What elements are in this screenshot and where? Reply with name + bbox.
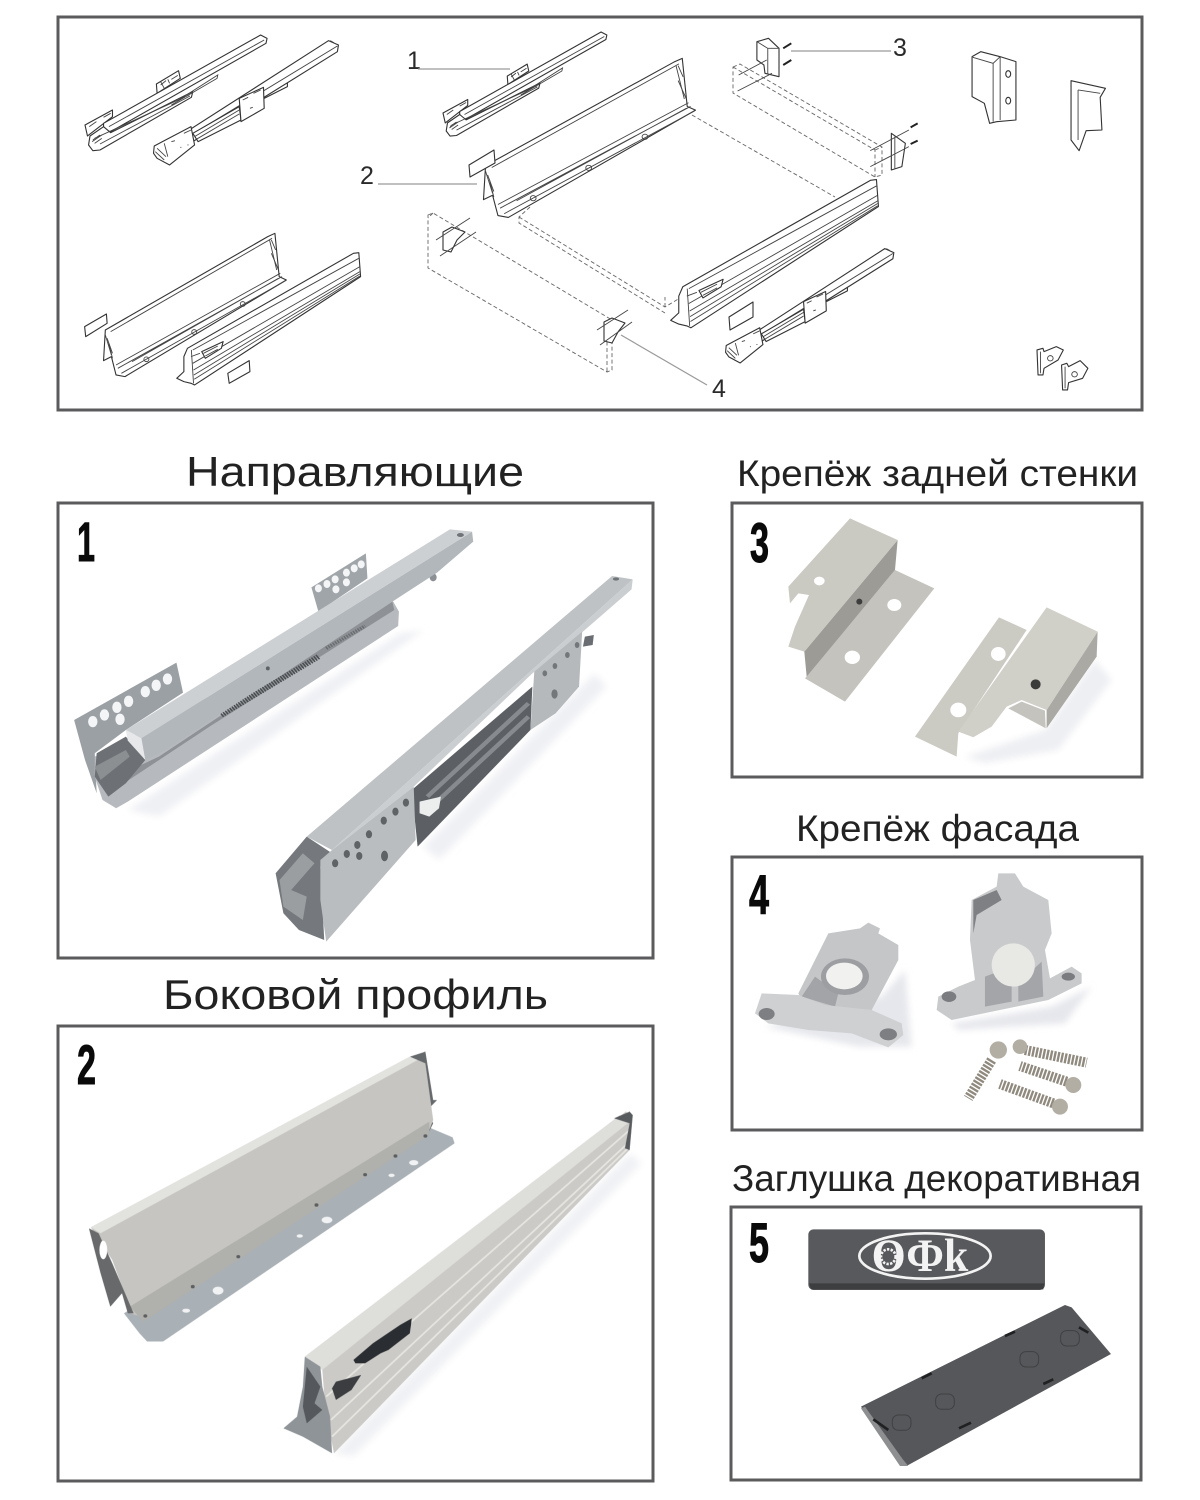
cap back clips bbox=[873, 1327, 1088, 1430]
left fastener: body bbox=[798, 923, 898, 1010]
right fastener: side slot bbox=[973, 890, 1002, 933]
left fastener: white disc bbox=[826, 963, 863, 989]
callout 2 leader bbox=[378, 183, 477, 185]
logo oval bbox=[859, 1233, 991, 1279]
upper rail, right view bbox=[154, 41, 338, 165]
front fastener 2 bbox=[1062, 361, 1088, 390]
profile A: rear edge bbox=[410, 1052, 437, 1135]
profile photos bbox=[89, 1052, 641, 1457]
left parts column bbox=[85, 35, 361, 385]
callout 3 number: 3 bbox=[893, 34, 907, 62]
callout 4 bbox=[621, 335, 726, 403]
cap back edge bbox=[861, 1407, 908, 1466]
panel: exploded assembly diagram bbox=[58, 17, 1142, 410]
right fastener: lower recess bbox=[985, 962, 1043, 1007]
plate outline, centre right bbox=[729, 302, 753, 330]
dashed tray base bbox=[519, 115, 835, 313]
left fastener: disc bbox=[821, 958, 869, 995]
rail B: nose light bbox=[280, 853, 315, 920]
callout 4 leader bbox=[621, 335, 707, 385]
rail B: front plate holes bbox=[332, 799, 409, 867]
rail A: rear plate bbox=[311, 553, 367, 612]
rail A: rear plate holes bbox=[315, 560, 365, 593]
panel 1: rails bbox=[58, 503, 653, 958]
profile B: cut-out upper bbox=[353, 1318, 412, 1363]
number 2: 2 bbox=[77, 1033, 96, 1096]
back bracket with screws, top bbox=[757, 38, 779, 77]
fastener photos bbox=[755, 873, 1092, 1115]
rail A: front plate holes bbox=[88, 673, 172, 727]
dashed front panel bbox=[428, 213, 612, 372]
front fastener screws right bbox=[597, 310, 632, 345]
rail B: mechanism bbox=[412, 687, 532, 847]
right parts group bbox=[738, 38, 1105, 390]
side profile, right view bbox=[177, 253, 361, 385]
rail A: nose light strip bbox=[95, 750, 130, 780]
rail A: spring bbox=[221, 657, 318, 715]
front fasteners bbox=[1037, 347, 1063, 375]
left fastener: base bbox=[755, 993, 903, 1047]
rail B: rear tab bbox=[583, 635, 594, 647]
profile B: rear dark bbox=[614, 1112, 633, 1150]
heading: side profile: Боковой профиль bbox=[163, 971, 548, 1018]
cap back dimples bbox=[892, 1331, 1079, 1430]
heading: decorative cap: Заглушка декоративная bbox=[732, 1158, 1141, 1199]
bracket B: under bbox=[1008, 702, 1046, 728]
rail B: front plate bbox=[320, 787, 416, 942]
right bracket screw tips bbox=[911, 123, 918, 144]
right fastener: body bbox=[937, 873, 1082, 1020]
cap back bbox=[861, 1305, 1111, 1465]
rail A: tube hole bbox=[457, 533, 464, 537]
right fastener: disc bbox=[992, 943, 1035, 987]
cap top bbox=[808, 1229, 1045, 1290]
fastener screw hole 2 bbox=[1072, 372, 1077, 377]
profile B: top band bbox=[305, 1115, 630, 1370]
bracket B: flange bbox=[915, 617, 1027, 757]
frame 1 bbox=[58, 503, 653, 958]
profile B: front end bbox=[283, 1357, 332, 1453]
rail A: tube end bbox=[126, 730, 145, 760]
profile A: main panel bbox=[91, 1057, 433, 1317]
centre rail 1 bbox=[443, 32, 607, 136]
diagram frame bbox=[58, 17, 1142, 410]
rail B: tube hole bbox=[613, 577, 619, 581]
right fastener: holes bbox=[942, 973, 1075, 1002]
profile B: ribs bbox=[326, 1130, 630, 1437]
shadows bbox=[765, 970, 1092, 1047]
frame 2 bbox=[58, 1026, 653, 1481]
bracket hole lower bbox=[1006, 97, 1011, 104]
bracket A: inner wall bbox=[804, 540, 898, 677]
callout 1 number: 1 bbox=[407, 47, 421, 75]
shadow bbox=[965, 660, 1112, 763]
large back bracket right bbox=[1071, 81, 1105, 151]
left fastener: holes bbox=[759, 1008, 897, 1040]
profile A: top highlight bbox=[91, 1057, 418, 1233]
profile A: flange holes bbox=[182, 1160, 418, 1313]
front fastener screws left bbox=[436, 218, 476, 256]
bracket photos bbox=[788, 518, 1112, 763]
panel 5: decorative cap bbox=[731, 1207, 1141, 1480]
frame 4 bbox=[732, 857, 1142, 1130]
cap plate outline A bbox=[85, 314, 107, 337]
side profile, left view bbox=[104, 233, 286, 377]
bracket B: holes bbox=[950, 647, 1006, 717]
rail B: plastic nose bbox=[276, 837, 332, 940]
cap photos bbox=[808, 1229, 1111, 1466]
bracket B: screw hole bbox=[1031, 679, 1041, 689]
centre side profile 2 bbox=[483, 58, 696, 217]
bracket A: screw hole bbox=[856, 599, 862, 605]
callout 3 bbox=[791, 34, 907, 62]
rail B: rear plate bbox=[530, 632, 582, 730]
rail B: rear plate holes bbox=[542, 642, 579, 699]
rail A: tube side bbox=[141, 532, 473, 760]
profile A: flange bbox=[124, 1127, 455, 1342]
profile A: end slot bbox=[99, 1241, 107, 1259]
cap plate outline B bbox=[228, 361, 250, 383]
shadows bbox=[128, 630, 606, 860]
heading: front fastener: Крепёж фасада bbox=[796, 808, 1079, 849]
rail B: mechanism stripes bbox=[427, 703, 528, 803]
left fastener: recess bbox=[802, 977, 838, 1007]
rail A: rear pin bbox=[430, 573, 437, 581]
rail B: tube side bbox=[332, 579, 633, 850]
profile B: main bbox=[305, 1112, 633, 1453]
rail B: tube top bbox=[307, 576, 633, 850]
upper rail, left view bbox=[85, 35, 267, 151]
rail A: tube top bbox=[126, 529, 472, 738]
profile A: dark end bbox=[89, 1228, 134, 1313]
profile B: cut-out lower bbox=[332, 1375, 361, 1400]
back bracket screw tips bbox=[783, 43, 791, 65]
rail A: spring rear bbox=[326, 626, 365, 648]
back bracket inner lines bbox=[738, 42, 779, 91]
callout 4 number: 4 bbox=[712, 375, 726, 403]
callout 1 bbox=[407, 47, 510, 75]
panel 3: back wall fastener bbox=[732, 503, 1142, 777]
fastener centres bbox=[1041, 352, 1065, 388]
logo gear bbox=[881, 1249, 896, 1264]
bracket B: top bbox=[958, 607, 1098, 737]
rail A: plastic nose bbox=[95, 737, 145, 797]
cap top edge bbox=[809, 1283, 1044, 1289]
large back bracket detail bbox=[973, 57, 1000, 122]
centre side profile right bbox=[671, 180, 878, 328]
profile A: fold bbox=[130, 1122, 429, 1322]
front panel fastener right bbox=[604, 318, 625, 343]
large back bracket left bbox=[972, 52, 1016, 123]
profile B: inner dark bbox=[303, 1367, 322, 1423]
number 4: 4 bbox=[749, 863, 769, 926]
profile B: shadow bbox=[334, 1153, 641, 1457]
plate outline, centre left bbox=[469, 150, 495, 177]
number 3: 3 bbox=[750, 511, 769, 574]
heading: back wall fastener: Крепёж задней стенки bbox=[737, 453, 1138, 494]
callout 2 bbox=[360, 162, 477, 190]
panel 2: side profile bbox=[58, 1026, 653, 1481]
logo text: ОФk bbox=[872, 1230, 968, 1282]
right bracket lines bbox=[870, 130, 909, 168]
rail photos bbox=[74, 529, 633, 942]
callout 2 number: 2 bbox=[360, 162, 374, 190]
bracket holes bbox=[1006, 71, 1011, 77]
frame 3 bbox=[732, 503, 1142, 777]
screw shafts bbox=[968, 1050, 1087, 1103]
dashed back panel bbox=[733, 64, 882, 177]
panel 4: front fastener bbox=[732, 857, 1142, 1130]
screw heads bbox=[990, 1039, 1081, 1115]
rail A: lower body bbox=[95, 600, 399, 808]
back bracket with screws, right bbox=[891, 133, 905, 170]
bracket A: flange bbox=[805, 570, 934, 702]
number 1: 1 bbox=[77, 510, 95, 573]
rail B: white cap bbox=[420, 797, 441, 817]
right bracket detail bbox=[1078, 90, 1100, 140]
rail A: side dots bbox=[266, 666, 270, 670]
rail A: front plate bbox=[74, 663, 183, 793]
bracket B: side bbox=[1047, 632, 1098, 728]
bracket A: holes bbox=[814, 577, 901, 664]
rail A: dark channel bbox=[116, 602, 394, 783]
callout 3 leader bbox=[791, 50, 891, 52]
front panel fastener left bbox=[443, 227, 465, 252]
frame 5 bbox=[731, 1207, 1141, 1480]
callout 1 leader bbox=[418, 68, 510, 70]
heading: rails: Направляющие bbox=[186, 448, 524, 495]
profile A: screw dots bbox=[143, 1134, 427, 1318]
bracket A: top bbox=[788, 518, 898, 652]
lower right rail bbox=[726, 249, 894, 363]
fastener screw holes bbox=[1048, 356, 1053, 361]
number 5: 5 bbox=[749, 1211, 769, 1274]
